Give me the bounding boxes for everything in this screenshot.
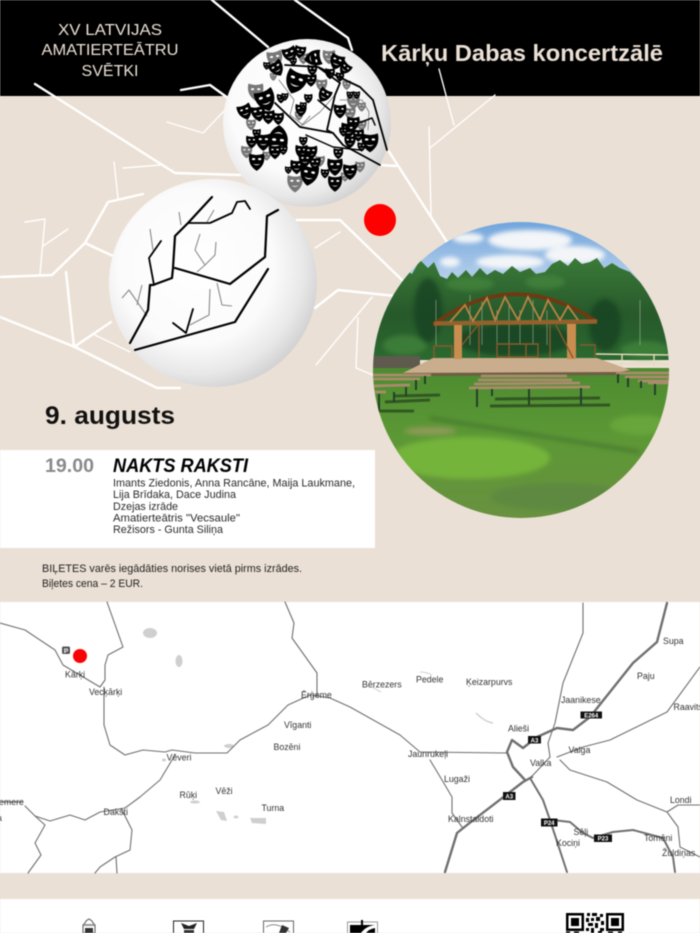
map place names: Sēļi: [574, 827, 588, 837]
map place names: Lugaži: [444, 774, 470, 784]
birch trunks: [436, 295, 640, 345]
map place names: Supa: [663, 636, 684, 646]
map place names: Tomēni: [644, 833, 672, 843]
logo: black emblem: [348, 920, 378, 933]
map place names: Pedele: [416, 674, 443, 684]
map place names: Vecķārķi: [89, 687, 122, 697]
map place names: Kalnstaldoti: [448, 814, 494, 824]
performance title: NAKTS RAKSTI: [113, 456, 249, 477]
roads: [0, 602, 700, 873]
map place names: Dakšti: [104, 807, 128, 817]
map location marker: [73, 649, 87, 663]
map place names: Bērzezers: [362, 680, 402, 690]
road number badges: A3: [505, 794, 514, 800]
tree branches: [275, 65, 387, 165]
map place names: Valka: [530, 758, 551, 768]
performance details: Dzejas izrāde: [113, 501, 178, 513]
theatre mask leaves: [236, 45, 378, 193]
ticket information: BIĻETES varēs iegādāties norises vietā pirms izrādes.: [42, 563, 302, 575]
stage floor: [403, 358, 630, 375]
performance details: Režisors - Gunta Siliņa: [113, 524, 224, 536]
white branch network: [0, 0, 495, 388]
lakes: [143, 628, 493, 824]
ticket information: Biļetes cena – 2 EUR.: [42, 578, 143, 590]
clouds: [440, 230, 605, 269]
black branches: [130, 197, 278, 350]
header title: festival name: [42, 22, 178, 80]
performance details: [113, 478, 355, 536]
sphere: theatre mask tree: [223, 39, 391, 207]
map place names: Kārķi: [65, 670, 85, 680]
fence, right: [596, 354, 672, 366]
sphere: bare tree branches: [109, 179, 317, 387]
map place names: Kociņi: [556, 838, 580, 848]
map place names: Paju: [637, 671, 655, 681]
stage posts: [454, 324, 576, 359]
road number badges: [503, 712, 612, 842]
performance details: Lija Brīdaka, Dace Judina: [113, 489, 237, 501]
left dirt pile: [370, 356, 420, 368]
parking sign: P: [64, 648, 69, 655]
map place names: Ērģeme: [301, 690, 332, 700]
map place names: Turna: [262, 803, 284, 813]
road map: [0, 602, 700, 873]
header title: venue: Kārķu Dabas koncertzālē: [381, 40, 663, 66]
map place names: Rūķi: [180, 790, 197, 800]
grey twigs: [122, 210, 232, 325]
road number badges: P24: [544, 821, 555, 827]
date heading: 9. augusts: [45, 402, 175, 430]
logo: landscape emblem: [264, 921, 294, 933]
map place names: Jaunrukeļi: [408, 749, 448, 759]
stage arch: [433, 294, 597, 359]
map place names: Vēveri: [166, 752, 191, 762]
QR code: [566, 913, 624, 933]
map place names: Alieši: [508, 724, 529, 734]
photo: wooden stage in a forest clearing: [370, 220, 672, 521]
header title: festival name: XV LATVIJAS: [58, 22, 162, 39]
road number badges: E264: [584, 713, 599, 719]
footer band: [0, 899, 700, 933]
header title: festival name: SVĒTKI: [82, 62, 138, 80]
programme panel: [0, 450, 375, 548]
map place names: Vīganti: [284, 720, 311, 730]
header title: festival name: AMATIERTEĀTRU: [42, 41, 178, 59]
map place names: Jaanikese: [561, 695, 601, 705]
performance details: Imants Ziedonis, Anna Rancāne, Maija Laukmane,: [113, 478, 355, 490]
map place names: Valga: [568, 745, 590, 755]
red marker dot: [364, 204, 396, 236]
map place names: Londi: [670, 795, 692, 805]
performance details: Amatierteātris "Vecsaule": [113, 512, 240, 524]
map place names: [0, 636, 700, 858]
black header band: [0, 0, 700, 96]
map place names: Vēži: [216, 786, 233, 796]
sky: [410, 221, 639, 280]
map place names: Žuldiņas: [662, 848, 696, 858]
forest: [370, 258, 672, 360]
benches: [370, 373, 672, 411]
parking sign: [62, 646, 70, 655]
grass: [370, 368, 672, 521]
map place names: Ķeizarpurvs: [466, 677, 513, 687]
road number badges: A3: [531, 738, 539, 744]
logo: coat of arms: [174, 921, 204, 933]
map place names: Bozēni: [274, 742, 300, 752]
performance time: 19.00: [45, 456, 94, 477]
ticket information: [42, 563, 302, 590]
logo: crest: [83, 919, 95, 933]
road number badges: P23: [598, 836, 609, 842]
